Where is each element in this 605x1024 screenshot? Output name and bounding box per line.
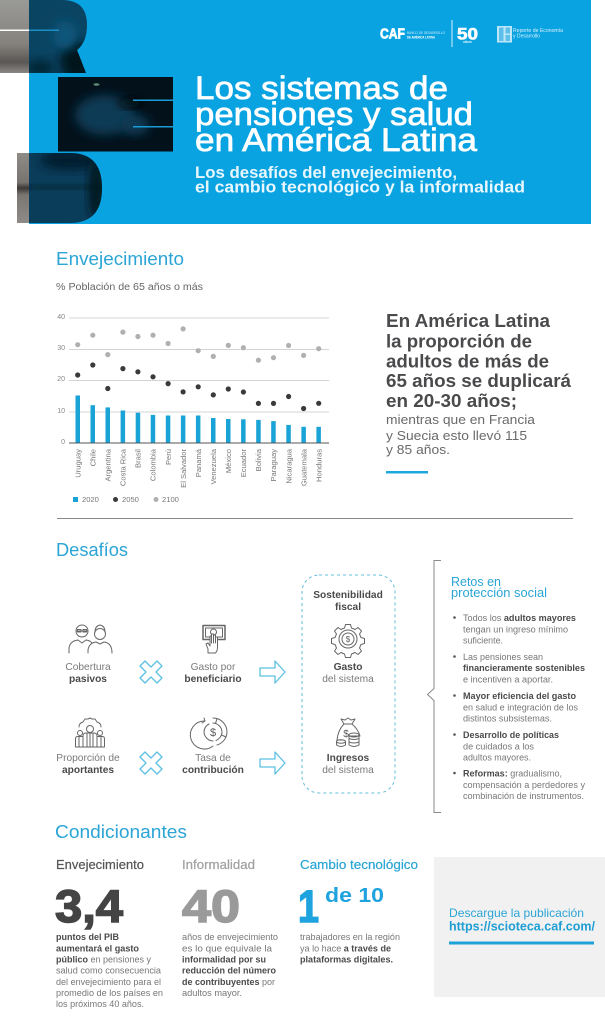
icon: older couple [69, 625, 112, 653]
label: Cobertura pasivos: pasivos [69, 674, 107, 685]
callout: aging statement: adultos de más de [386, 352, 549, 372]
chart: population over 65: 40 [57, 314, 65, 321]
stat: 1 de 10: de 10 [325, 884, 384, 907]
label: Tasa de contribución: Tasa de [195, 753, 231, 764]
chart legend: 2050 [122, 495, 139, 504]
description: puntos del PIB [56, 932, 120, 942]
icon: workers group [76, 718, 104, 747]
chart: population over 65: Panamá [194, 448, 203, 477]
label: Ingresos del sistema: del sistema [322, 765, 374, 776]
photo letter D [17, 150, 105, 223]
bullet list: financieramente sostenibles [463, 663, 585, 673]
bullet list: Desarrollo de políticas [463, 730, 559, 740]
description: promedio de los países en [56, 988, 163, 998]
icon: gear with dollar: $ [346, 635, 351, 644]
divider [57, 518, 573, 519]
bullet list: Reformas: gradualismo, [463, 768, 562, 778]
CAF logo: CAF [380, 26, 405, 42]
panel heading: protección social [451, 585, 547, 600]
chart: population over 65: Chile [88, 449, 98, 466]
description: los próximos 40 años. [56, 999, 144, 1009]
chart: population over 65: Brasil [134, 449, 143, 468]
label: Proporción de aportantes: aportantes [62, 765, 114, 776]
chart: population over 65: Uruguay [74, 449, 82, 478]
report logo [497, 26, 563, 42]
column: Envejecimiento [55, 858, 163, 1009]
chart subtitle: % Población de 65 años o más [56, 282, 203, 293]
diagram: challenges [56, 575, 395, 793]
label: Gasto por beneficiario: beneficiario [184, 674, 242, 685]
chart: population over 65: Nicaragua [284, 448, 293, 484]
bullet list: distintos subsistemas. [463, 714, 552, 724]
subtitle: el cambio tecnológico y la informalidad [195, 178, 525, 196]
CAF logo: AÑOS [463, 39, 472, 44]
icon: hand with banknote [203, 626, 225, 653]
download link: https://scioteca.caf.com/ [449, 920, 596, 934]
heading: Condicionantes: Condicionantes [55, 821, 187, 842]
icon: money bag and coins: $ [343, 729, 349, 740]
label: Tasa de contribución: contribución [182, 765, 244, 776]
title [195, 70, 477, 158]
label: Cobertura pasivos: Cobertura [65, 662, 111, 673]
CAF logo: BANCO DE DESARROLLO [407, 31, 445, 35]
photo letter E [58, 77, 173, 152]
underline [449, 942, 594, 944]
chart: population over 65: 0 [61, 439, 65, 446]
arrow [260, 752, 285, 774]
label: Proporción de aportantes: Proporción de [56, 753, 120, 764]
chart: population over 65 [57, 314, 329, 504]
panel heading [451, 574, 547, 600]
description: años de envejecimiento [182, 932, 278, 942]
description: plataformas digitales. [300, 954, 393, 964]
callout: aging statement: y 85 años. [386, 442, 450, 457]
column: Cambio tecnológico [298, 858, 418, 964]
chart: population over 65: Ecuador [239, 449, 248, 477]
heading: Desafíos: Desafíos [56, 539, 128, 560]
label: Gasto del sistema: del sistema [322, 674, 374, 685]
stat: 40: 40 [182, 881, 240, 932]
bracket [428, 560, 441, 812]
column heading: Cambio tecnológico [300, 858, 418, 872]
chart: population over 65: 30 [57, 345, 65, 352]
description: público en pensiones y [56, 954, 151, 964]
subtitle [195, 164, 525, 196]
bullet list: en salud e integración de los [463, 702, 578, 712]
column heading: Envejecimiento [56, 858, 144, 872]
bullet list: Las pensiones sean [463, 652, 543, 662]
description: trabajadores en la región [300, 932, 400, 942]
chart: population over 65: El Salvador [179, 449, 188, 488]
CAF logo: DE AMÉRICA LATINA [407, 34, 436, 40]
report logo: y Desarrollo [513, 34, 540, 40]
bullet list: e incentiven a aportar. [463, 674, 553, 684]
label: Proporción de aportantes [56, 753, 120, 776]
callout: aging statement: mientras que en Francia [386, 412, 536, 427]
callout: aging statement: 65 años se duplicará [386, 371, 572, 391]
title: en América Latina [195, 122, 477, 158]
bullet list: de cuidados a los [463, 742, 534, 752]
chart: population over 65: Argentina [104, 448, 112, 482]
label: Gasto por beneficiario [184, 662, 242, 685]
callout: aging statement: En América Latina [386, 311, 551, 331]
description: aumentará el gasto [56, 944, 140, 954]
subtitle: Los desafíos del envejecimiento, [195, 164, 457, 182]
panel: download [434, 857, 605, 997]
label: Tasa de contribución [182, 753, 244, 776]
description [300, 932, 400, 964]
description: adultos mayor. [182, 988, 242, 998]
description: del envejecimiento para el [56, 977, 161, 987]
callout: aging statement [386, 311, 572, 474]
panel: social protection [451, 574, 586, 801]
description: salud como consecuencia [56, 966, 161, 976]
icon: money bag and coins [336, 718, 360, 746]
bullet list: Todos los adultos mayores [463, 613, 576, 623]
title: Los sistemas de [195, 70, 448, 106]
chart: population over 65: Guatemala [299, 448, 308, 486]
chart: population over 65: Colombia [149, 448, 158, 481]
chart legend: 2100 [162, 495, 179, 504]
CAF logo [380, 20, 478, 47]
label: Gasto del sistema [322, 662, 374, 685]
chart: population over 65: 20 [57, 376, 65, 383]
panel heading: Retos en [451, 574, 501, 589]
icon: gear with dollar [332, 624, 364, 658]
panel heading: fiscal [335, 602, 361, 613]
bullet list: adultos mayores. [463, 752, 531, 762]
chart legend [73, 495, 179, 504]
report logo: Reporte de Economía [513, 28, 563, 34]
chart: population over 65: Venezuela [209, 448, 218, 484]
bullet list: tengan un ingreso mínimo [463, 624, 568, 634]
description [182, 932, 278, 998]
arrow [260, 661, 285, 683]
label: Ingresos del sistema: Ingresos [327, 753, 370, 764]
icon: multiply [140, 752, 162, 774]
title: pensiones y salud [195, 96, 473, 132]
icon: rate cycle: $ [210, 727, 216, 739]
chart legend: 2020 [82, 495, 99, 504]
column heading: Informalidad [182, 858, 255, 872]
label: Gasto del sistema: Gasto [334, 662, 362, 673]
chart: population over 65: Perú [164, 449, 173, 465]
callout: aging statement: en 20-30 años; [386, 391, 517, 411]
panel heading: Sostenibilidad [313, 590, 383, 601]
callout: aging statement: la proporción de [386, 332, 532, 352]
stat: 3,4: 3,4 [55, 881, 123, 932]
bullet list [453, 613, 586, 801]
CAF logo: 50 [457, 26, 478, 44]
chart: population over 65: Paraguay [269, 449, 278, 482]
bullet list: suficiente. [463, 636, 503, 646]
description: de contribuyentes por [182, 977, 275, 987]
callout: aging statement: y Suecia esto llevó 115 [386, 428, 527, 443]
label: Cobertura pasivos [65, 662, 111, 685]
chart: population over 65: Honduras [314, 449, 323, 482]
column: Informalidad [182, 858, 278, 998]
bullet list: compensación a perdedores y [463, 780, 586, 790]
download text: Descargue la publicación [449, 906, 584, 920]
chart: population over 65: 10 [57, 408, 65, 415]
stat: 1 de 10: 1 [298, 881, 319, 932]
description [56, 932, 163, 1009]
label: Gasto por beneficiario: Gasto por [191, 662, 236, 673]
panel: fiscal sustainability [302, 575, 395, 793]
chart: population over 65: Costa Rica [119, 448, 128, 486]
stat: 1 de 10 [298, 881, 384, 932]
description: informalidad por su [182, 954, 266, 964]
description: reducción del número [182, 966, 276, 976]
header banner [0, 0, 591, 224]
icon: multiply [140, 661, 162, 683]
bullet list: Mayor eficiencia del gasto [463, 691, 576, 701]
chart: population over 65: Bolivia [254, 448, 263, 471]
bullet list: combinación de instrumentos. [463, 791, 584, 801]
label: Ingresos del sistema [322, 753, 374, 776]
chart: population over 65: México [224, 449, 233, 473]
heading: Envejecimiento: Envejecimiento [56, 248, 184, 269]
photo letter R [0, 0, 87, 73]
description: ya lo hace a través de [300, 944, 391, 954]
icon: rate cycle [190, 718, 227, 749]
description: es lo que equivale la [182, 944, 272, 954]
panel heading [313, 590, 383, 613]
